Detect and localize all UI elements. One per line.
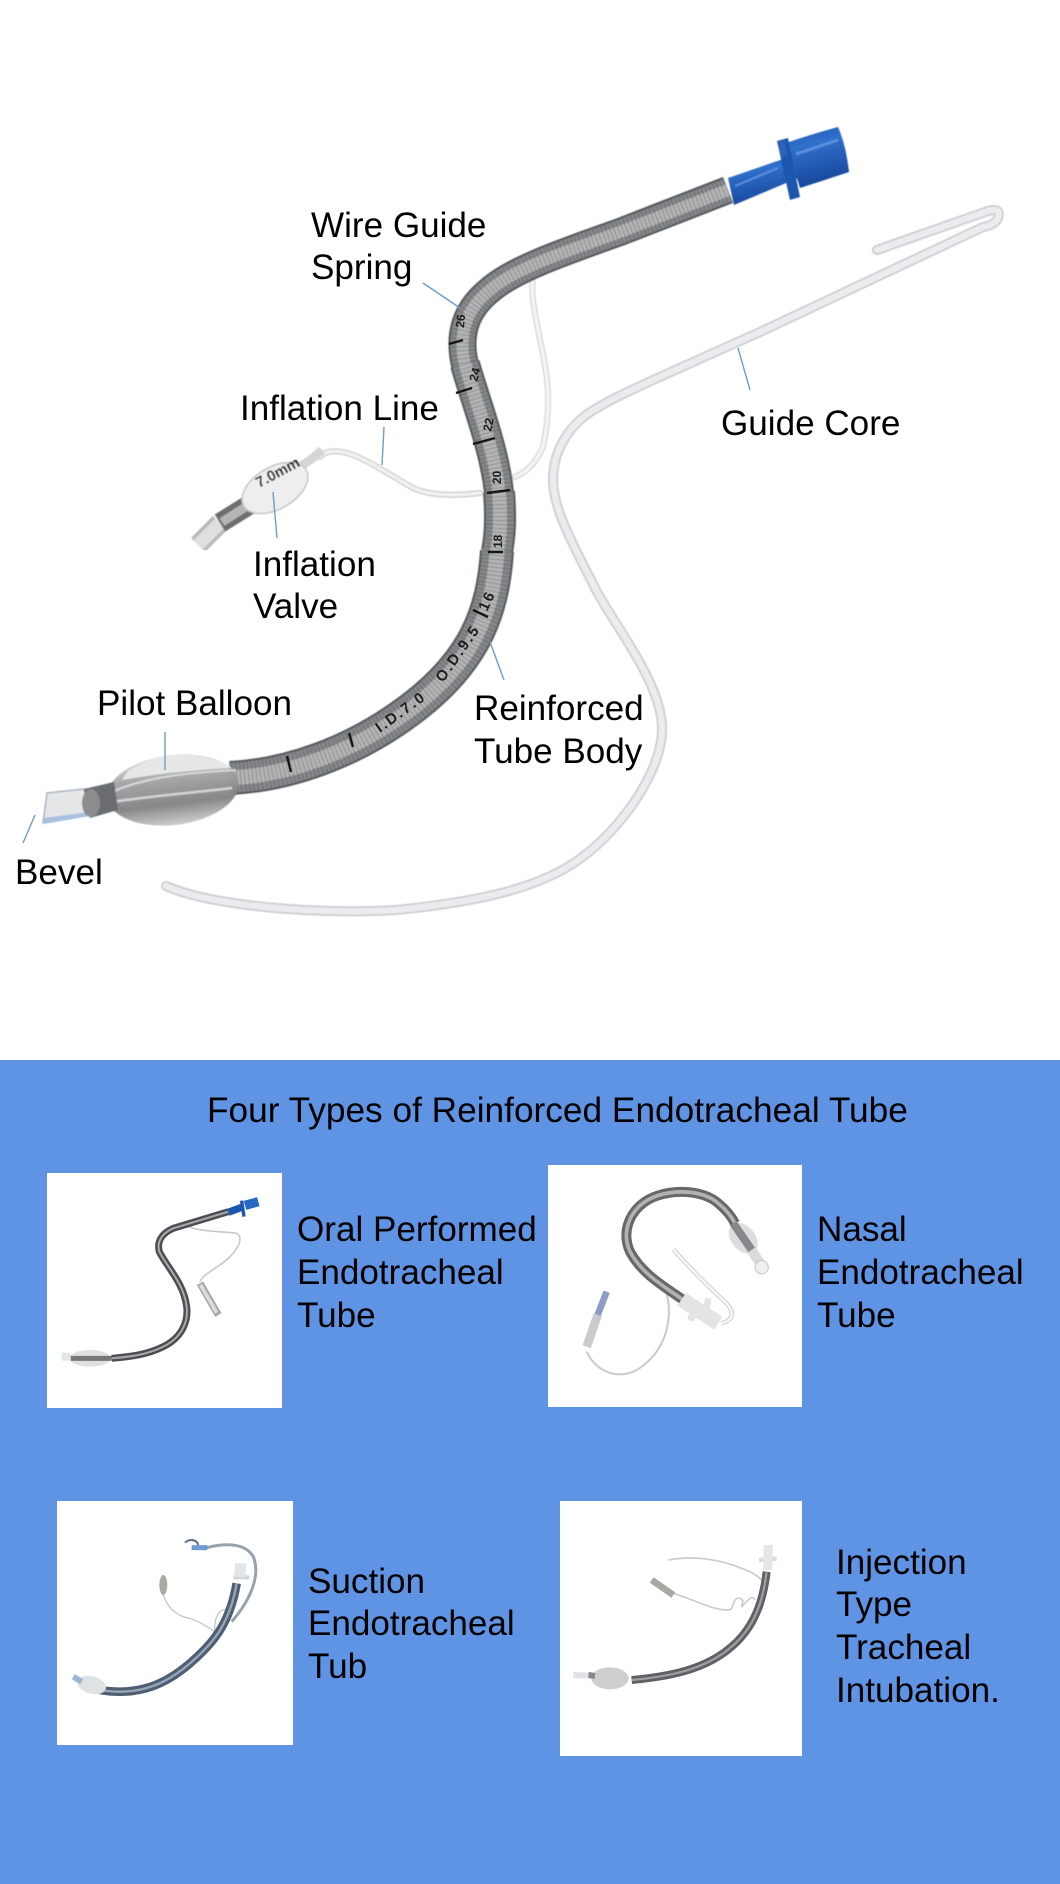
card label (817, 1210, 1024, 1335)
card label: Tub (308, 1647, 367, 1686)
thumbnail: nasal tube (587, 1192, 768, 1374)
card label: Tracheal (836, 1628, 971, 1667)
card label: Suction (308, 1562, 425, 1601)
label: inflation valve: Valve (253, 587, 338, 626)
label: wire guide spring (311, 206, 486, 308)
label: reinforced tube body: Reinforced (474, 689, 644, 728)
label: pilot balloon: Pilot Balloon (97, 684, 292, 723)
label: bevel: Bevel (15, 853, 103, 892)
card label: Nasal (817, 1210, 907, 1249)
pilot balloon: cuff (103, 747, 243, 833)
card label: Intubation. (836, 1671, 1000, 1710)
tube scale marks and printing: 16 (475, 588, 499, 614)
label: guide core (721, 348, 900, 443)
label: reinforced tube body (474, 642, 644, 771)
label: wire guide spring: Wire Guide (311, 206, 486, 245)
tube scale marks and printing: 18 (491, 534, 505, 548)
card label (836, 1543, 1000, 1710)
card label (308, 1562, 515, 1686)
card: oral performed endotracheal tube (47, 1173, 537, 1408)
guide core: white stylet (166, 210, 999, 911)
tube scale marks and printing: I.D.7.0 (372, 688, 429, 736)
label: bevel (15, 815, 103, 892)
thumbnail: suction tube (73, 1540, 256, 1697)
card label: Tube (817, 1296, 896, 1335)
label: wire guide spring: Spring (311, 248, 412, 287)
tube scale marks and printing: 20 (490, 470, 504, 484)
card label: Endotracheal (308, 1604, 515, 1643)
card label: Injection (836, 1543, 967, 1582)
tube scale marks and printing: 22 (480, 416, 497, 433)
tube scale marks and printing: 26 (453, 313, 468, 328)
inflation valve (198, 450, 322, 545)
label: guide core: Guide Core (721, 404, 900, 443)
bevel: distal tip and neck (43, 782, 118, 824)
connector: blue 15mm adapter (728, 127, 849, 205)
label: reinforced tube body: Tube Body (474, 732, 643, 771)
inflation line (320, 273, 548, 495)
tube scale marks and printing (287, 313, 510, 772)
card label: Type (836, 1585, 912, 1624)
inflation valve: 7.0mm (253, 454, 303, 492)
card: nasal endotracheal tube (548, 1165, 1024, 1407)
label: inflation line: Inflation Line (240, 389, 439, 428)
card label: Endotracheal (817, 1253, 1024, 1292)
card label: Oral Performed (297, 1210, 537, 1249)
card label: Endotracheal (297, 1253, 504, 1292)
heading: Four Types of Reinforced Endotracheal Tube (207, 1091, 908, 1130)
panel: four types of reinforced endotracheal tube (0, 1060, 1060, 1884)
reinforced tube body (230, 190, 728, 778)
card label: Tube (297, 1296, 376, 1335)
label: inflation valve (253, 492, 376, 626)
thumbnail: injection tube (573, 1545, 777, 1689)
card: injection type tracheal intubation (560, 1501, 1000, 1756)
tube scale marks and printing: 24 (466, 366, 483, 383)
panel: top white diagram area (0, 0, 1060, 1060)
card: suction endotracheal tube (57, 1501, 515, 1745)
card label (297, 1210, 537, 1335)
tube scale marks and printing: O.D.9.5 (432, 622, 484, 685)
thumbnail: oral tube (62, 1201, 258, 1367)
label: inflation valve: Inflation (253, 545, 376, 584)
